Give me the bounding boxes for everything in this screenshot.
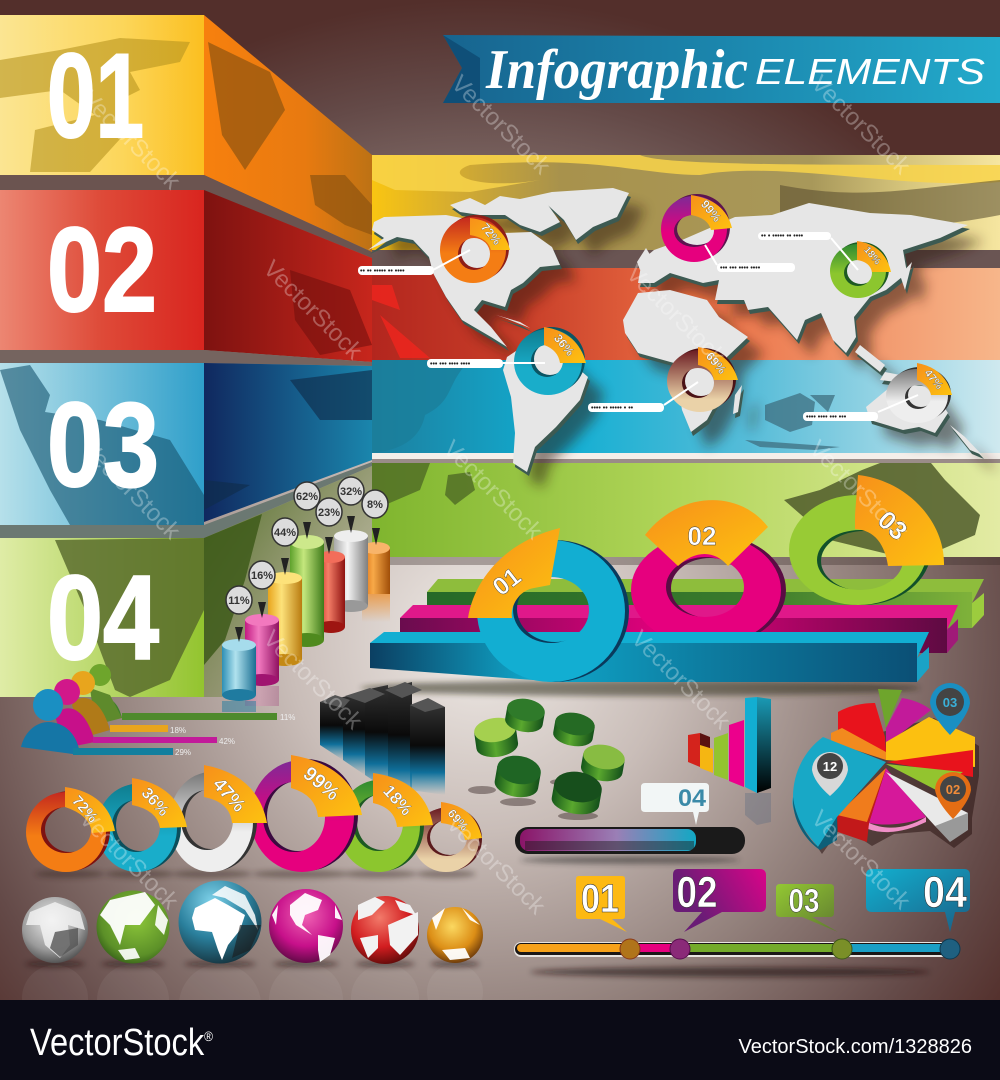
globes row <box>22 880 483 1046</box>
slider knobs <box>620 939 960 959</box>
tag 03 <box>776 882 838 932</box>
progress label: 04 <box>678 785 707 812</box>
number 01: 01 <box>47 29 144 163</box>
pin 8% <box>362 490 388 545</box>
disc 4 <box>579 742 627 784</box>
tag 04 <box>866 868 970 932</box>
magenta ribbon <box>400 534 958 653</box>
people bar chart: 42% <box>219 737 235 746</box>
disc 2 <box>503 696 547 735</box>
number 04: 04 <box>47 551 159 685</box>
tag 04: 04 <box>923 868 967 917</box>
cylinder 62% <box>290 535 324 647</box>
flag 02 <box>645 500 768 566</box>
watermarks: VectorStock <box>806 70 916 181</box>
continents <box>368 188 982 472</box>
pin 12 <box>812 752 848 796</box>
pin 02 <box>935 772 971 819</box>
floor shadow <box>360 680 920 696</box>
watermarks: VectorStock <box>626 625 736 736</box>
people bar chart <box>21 660 295 757</box>
tag 02 <box>673 868 766 932</box>
panel: 01 <box>0 15 372 258</box>
footer: VectorStock <box>30 1022 233 1064</box>
person blue <box>21 689 80 755</box>
pin 11% <box>226 586 252 642</box>
panel: 04 <box>0 466 372 697</box>
tag 03: 03 <box>788 882 820 919</box>
cylinder bar chart <box>222 477 390 712</box>
pin 03 <box>930 683 970 735</box>
ring 36%: 36% <box>138 785 172 820</box>
watermarks: VectorStock <box>446 70 556 181</box>
flag 01: 01 <box>487 562 527 602</box>
watermarks: VectorStock <box>258 625 368 736</box>
person magenta <box>54 679 95 748</box>
cylinder 44% <box>268 572 302 666</box>
person green <box>85 660 122 725</box>
map ring: 36% <box>514 327 586 395</box>
ring 72% <box>26 787 115 872</box>
map shadow <box>384 204 998 488</box>
tag 01 <box>576 876 627 932</box>
step bar chart <box>688 697 771 825</box>
footer: ® <box>204 1028 214 1044</box>
people bar chart: 11% <box>280 713 295 722</box>
pin 11%: 11% <box>228 595 250 607</box>
world map <box>368 188 998 488</box>
people bar chart: 29% <box>175 748 191 757</box>
ring 18% <box>338 773 433 872</box>
map callout labels: ••• ••• •••• •••• <box>430 361 471 368</box>
pin 32%: 32% <box>340 486 362 498</box>
map ring: 99% <box>661 194 732 262</box>
number 02: 02 <box>47 203 157 337</box>
green discs <box>468 696 627 820</box>
panel: 03 <box>0 363 372 538</box>
blue ribbon <box>370 540 929 682</box>
globe blue <box>178 880 262 964</box>
panel: 02 <box>0 190 372 366</box>
cylinder 11% <box>222 639 256 712</box>
pin 44% <box>272 518 298 575</box>
bar lines <box>122 713 277 720</box>
tag 01: 01 <box>581 877 619 921</box>
pin 12: 12 <box>823 759 837 774</box>
ring 72%: 72% <box>68 792 101 826</box>
watermarks: VectorStock <box>74 805 184 916</box>
globe reflections <box>22 963 483 1046</box>
map callout labels: •••• •••• ••• ••• <box>806 414 847 421</box>
green ribbon <box>427 495 984 628</box>
map depth <box>370 192 984 476</box>
map ring: 18%: 18% <box>861 245 883 267</box>
disc shadows <box>468 779 598 820</box>
pin 32% <box>338 477 364 533</box>
cylinder 23% <box>317 551 345 633</box>
watermarks: VectorStock <box>804 435 914 546</box>
ring 99%: 99% <box>299 763 344 805</box>
ring 69% <box>413 802 482 872</box>
slider segments <box>517 944 950 952</box>
footer: VectorStock.com/1328826 <box>739 1036 972 1058</box>
person orange <box>71 671 110 738</box>
people bar chart: 18% <box>170 726 186 735</box>
pin 03: 03 <box>943 695 957 710</box>
globe silver <box>22 897 88 963</box>
number 03: 03 <box>47 378 159 512</box>
pin 16% <box>249 561 275 618</box>
flag 03 <box>855 475 944 566</box>
disc 3 <box>551 710 597 749</box>
ring shadows <box>35 870 476 878</box>
flag 01 <box>468 528 560 618</box>
globe yellow <box>427 907 483 963</box>
progress bar <box>515 783 745 864</box>
pin 23%: 23% <box>318 507 340 519</box>
pin 62% <box>294 482 320 539</box>
pin 44%: 44% <box>274 527 296 539</box>
watermarks: VectorStock <box>441 810 551 921</box>
3D dark blocks <box>320 682 445 800</box>
cylinder 32% <box>334 530 368 612</box>
map ring: 36%: 36% <box>551 331 577 359</box>
pin 62%: 62% <box>296 491 318 503</box>
title ribbon: ELEMENTS <box>755 51 985 92</box>
ring row <box>26 755 482 878</box>
disc 1 <box>473 715 520 760</box>
map ring: 72%: 72% <box>478 220 504 248</box>
map ring: 18% <box>830 241 891 298</box>
3D ribbon loops <box>360 475 984 696</box>
pins <box>226 477 388 642</box>
pin 16%: 16% <box>251 570 273 582</box>
title ribbon <box>443 35 1000 103</box>
disc 6 <box>550 768 604 818</box>
pin 23% <box>316 498 342 554</box>
map callout labels <box>358 232 918 421</box>
globe shadows <box>25 961 480 967</box>
watermarks: VectorStock <box>621 260 731 371</box>
progress label <box>641 783 709 825</box>
map ring: 47% <box>886 363 952 423</box>
flag 02: 02 <box>688 521 716 551</box>
title ribbon: Infographic <box>485 39 748 101</box>
globe magenta <box>269 889 343 963</box>
pin 8%: 8% <box>367 499 383 511</box>
map callout labels: •• • ••••• •• •••• <box>761 233 804 240</box>
map callout labels: •••• •• ••••• • •• <box>591 405 634 412</box>
watermarks: VectorStock <box>258 255 368 366</box>
watermarks: VectorStock <box>438 435 548 546</box>
timeline slider <box>514 868 970 977</box>
map ring: 72% <box>440 215 510 283</box>
map callout labels: ••• ••• •••• •••• <box>720 265 761 272</box>
map ring: 69%: 69% <box>703 349 729 377</box>
ring 36% <box>97 778 187 872</box>
map callout labels: •• •• ••••• •• •••• <box>360 268 405 275</box>
flag 03: 03 <box>872 504 913 546</box>
watermarks <box>74 70 916 921</box>
pin 02: 02 <box>946 782 960 797</box>
cylinder 8% <box>362 542 390 622</box>
globe red <box>351 896 419 964</box>
footer <box>0 1000 1000 1080</box>
globe green <box>96 890 170 964</box>
ring 99% <box>250 755 362 872</box>
ring 69%: 69% <box>445 806 471 834</box>
ring 47%: 47% <box>208 774 249 817</box>
disc 5 <box>493 752 543 800</box>
pie chart with pins <box>792 683 979 854</box>
map ring: 99%: 99% <box>698 197 724 225</box>
map ring: 69% <box>667 347 738 412</box>
watermarks: VectorStock <box>76 85 186 196</box>
watermarks: VectorStock <box>76 435 186 546</box>
ring 47% <box>169 765 267 872</box>
watermarks: VectorStock <box>806 805 916 916</box>
tag 02: 02 <box>676 868 718 917</box>
cylinder 16% <box>245 614 279 706</box>
map ring: 47%: 47% <box>922 367 945 392</box>
ring 18%: 18% <box>379 781 416 819</box>
panel: right stripes behind map <box>372 155 1000 565</box>
